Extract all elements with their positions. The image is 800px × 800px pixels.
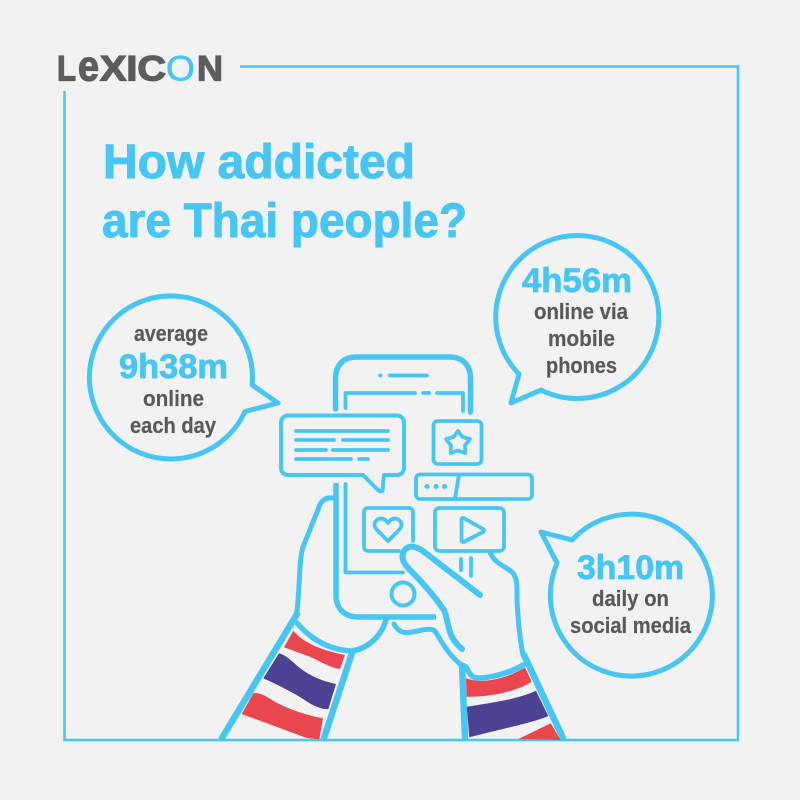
icon: video card (435, 508, 504, 551)
callout: average online time: online (143, 386, 204, 411)
callout: average online time: each day (130, 413, 217, 438)
pointing finger (402, 547, 480, 649)
icon: heart card (364, 508, 413, 551)
callout: social media time: social media (570, 613, 692, 638)
callout: mobile online time: online via (534, 299, 629, 324)
logo: Lexicon: L (57, 50, 76, 88)
callout: social media time: 3h10m (577, 549, 684, 587)
logo: Lexicon (57, 42, 223, 90)
logo: Lexicon: e (78, 42, 99, 90)
callout: average online time (89, 296, 278, 459)
phone body (336, 357, 471, 617)
callout: mobile online time: 4h56m (522, 262, 632, 300)
right hand and sleeve (394, 552, 563, 738)
left hand and sleeve (222, 498, 386, 738)
illustration: hands holding phone (222, 357, 563, 740)
callout: social media time (541, 514, 712, 676)
callout: average online time: average (134, 321, 208, 346)
sleeve stripes: left arm (242, 631, 345, 739)
search bar (416, 474, 532, 499)
title (102, 136, 467, 248)
icon: home button (392, 582, 414, 606)
logo: Lexicon: N (197, 50, 223, 88)
title: are Thai people? (102, 195, 467, 248)
icon: star card (434, 421, 482, 464)
callout: mobile online time: mobile (548, 326, 615, 351)
callout: social media time: daily on (592, 586, 669, 611)
logo: Lexicon: O (166, 50, 195, 88)
title: How addicted (103, 136, 415, 189)
chat bubble with text lines (281, 416, 404, 491)
sleeve stripes: right arm (466, 667, 561, 740)
callout: mobile online time (496, 236, 659, 403)
callout: average online time: 9h38m (119, 348, 228, 386)
callout: mobile online time: phones (546, 353, 617, 378)
logo: Lexicon: XIC (100, 50, 166, 88)
